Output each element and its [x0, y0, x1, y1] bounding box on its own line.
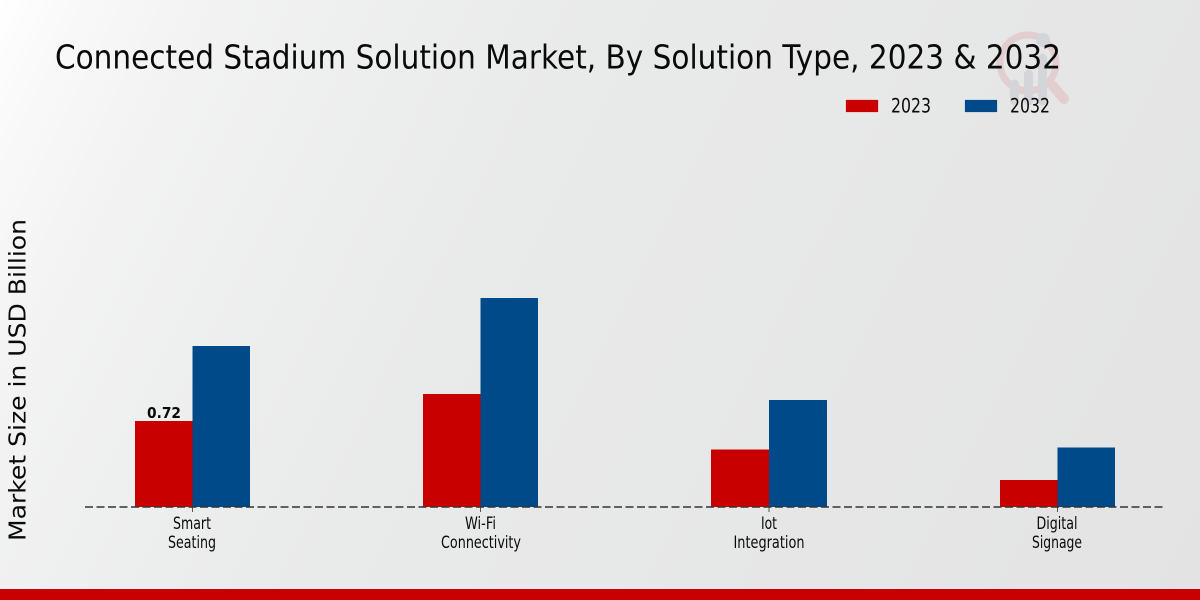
- category label: Wi-Fi Connectivity: Connectivity: [441, 533, 521, 552]
- footer bar: [0, 589, 1200, 600]
- y axis label: Market Size in USD Billion: [4, 219, 32, 541]
- legend label: 2023: 2023: [891, 94, 931, 118]
- icon: watermark magnifier logo: [1000, 33, 1064, 101]
- bars: Wi-Fi Connectivity: [423, 298, 538, 507]
- axis ticks: [192, 507, 1058, 512]
- category label: Smart Seating: Smart: [173, 514, 211, 533]
- legend label: 2032: 2032: [1010, 94, 1050, 118]
- category label: Smart Seating: [168, 514, 216, 552]
- category label: Iot Integration: Integration: [734, 533, 804, 552]
- category label: Smart Seating: Seating: [168, 533, 216, 552]
- bars: Digital Signage: [1000, 448, 1115, 507]
- bars: Iot Integration: [711, 400, 827, 507]
- title: Connected Stadium Solution Market, By Solution Type, 2023 & 2032: [55, 38, 1061, 76]
- category label: Wi-Fi Connectivity: [441, 514, 521, 552]
- legend swatch: 2032: [964, 100, 998, 112]
- legend: [846, 94, 1050, 118]
- category label: Digital Signage: Digital: [1036, 514, 1078, 533]
- category label: Digital Signage: [1032, 514, 1082, 552]
- bars: Smart Seating: [135, 346, 250, 507]
- bar chart: [85, 298, 1164, 552]
- legend swatch: 2023: [846, 100, 878, 112]
- category label: Iot Integration: Iot: [761, 514, 777, 533]
- x axis dashed baseline: [85, 506, 1164, 508]
- category label: Iot Integration: [734, 514, 804, 552]
- category label: Wi-Fi Connectivity: Wi-Fi: [465, 514, 496, 533]
- category label: Digital Signage: Signage: [1032, 533, 1082, 552]
- data label: 0.72: 0.72: [147, 404, 181, 422]
